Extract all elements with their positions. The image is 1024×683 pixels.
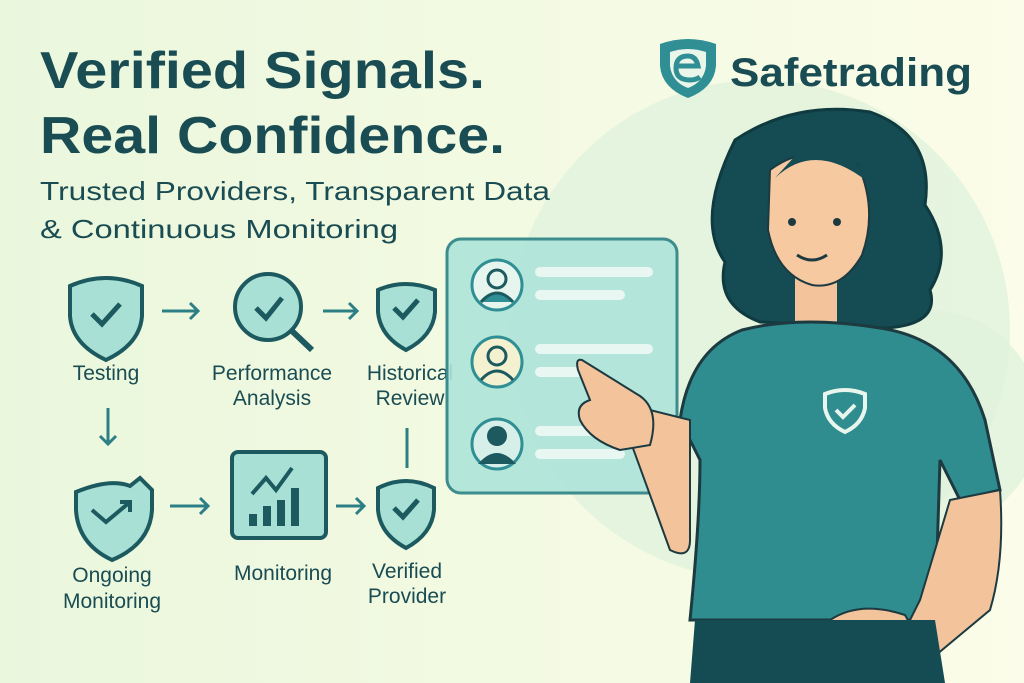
step: monitoring xyxy=(232,452,332,585)
arrow xyxy=(323,303,357,319)
arrow xyxy=(170,498,208,514)
step: ongoing monitoring xyxy=(63,478,161,613)
avatar 1 xyxy=(472,260,522,310)
pants xyxy=(690,620,945,683)
arrow xyxy=(162,303,198,319)
face xyxy=(768,154,869,286)
step: monitoring: Monitoring xyxy=(234,562,332,585)
panel: provider card xyxy=(447,239,677,493)
right arm xyxy=(895,490,1001,660)
arrow xyxy=(336,498,364,514)
step: verified provider xyxy=(368,481,446,608)
pointing arm xyxy=(630,410,690,553)
title: Real Confidence. xyxy=(40,107,505,165)
step: testing: Testing xyxy=(73,362,139,385)
avatar 2 xyxy=(472,337,522,387)
step: performance analysis xyxy=(212,274,332,410)
avatar 3 xyxy=(472,419,522,469)
background circle xyxy=(510,80,1024,580)
step: historical review: Review xyxy=(376,387,445,410)
logo: Safetrading xyxy=(730,51,972,95)
step: performance analysis: Performance xyxy=(212,362,332,385)
step: performance analysis: Analysis xyxy=(233,387,311,410)
step: ongoing monitoring: Monitoring xyxy=(63,590,161,613)
step: historical review: Historical xyxy=(367,362,453,385)
subtitle: Trusted Providers, Transparent Data xyxy=(40,176,551,206)
step: historical review xyxy=(367,284,453,410)
step: verified provider: Verified xyxy=(372,560,442,583)
subtitle: & Continuous Monitoring xyxy=(40,214,398,244)
neck xyxy=(795,270,837,330)
logo xyxy=(660,39,972,98)
step: testing xyxy=(70,278,142,385)
connector line xyxy=(406,428,408,468)
title xyxy=(40,42,505,165)
shirt xyxy=(680,322,1000,620)
woman xyxy=(577,109,1001,683)
step: verified provider: Provider xyxy=(368,585,446,608)
hair xyxy=(712,109,941,328)
subtitle xyxy=(40,176,551,244)
step: ongoing monitoring: Ongoing xyxy=(72,564,152,587)
shirt logo xyxy=(825,390,865,432)
arrow down xyxy=(100,408,116,444)
title: Verified Signals. xyxy=(40,42,485,100)
